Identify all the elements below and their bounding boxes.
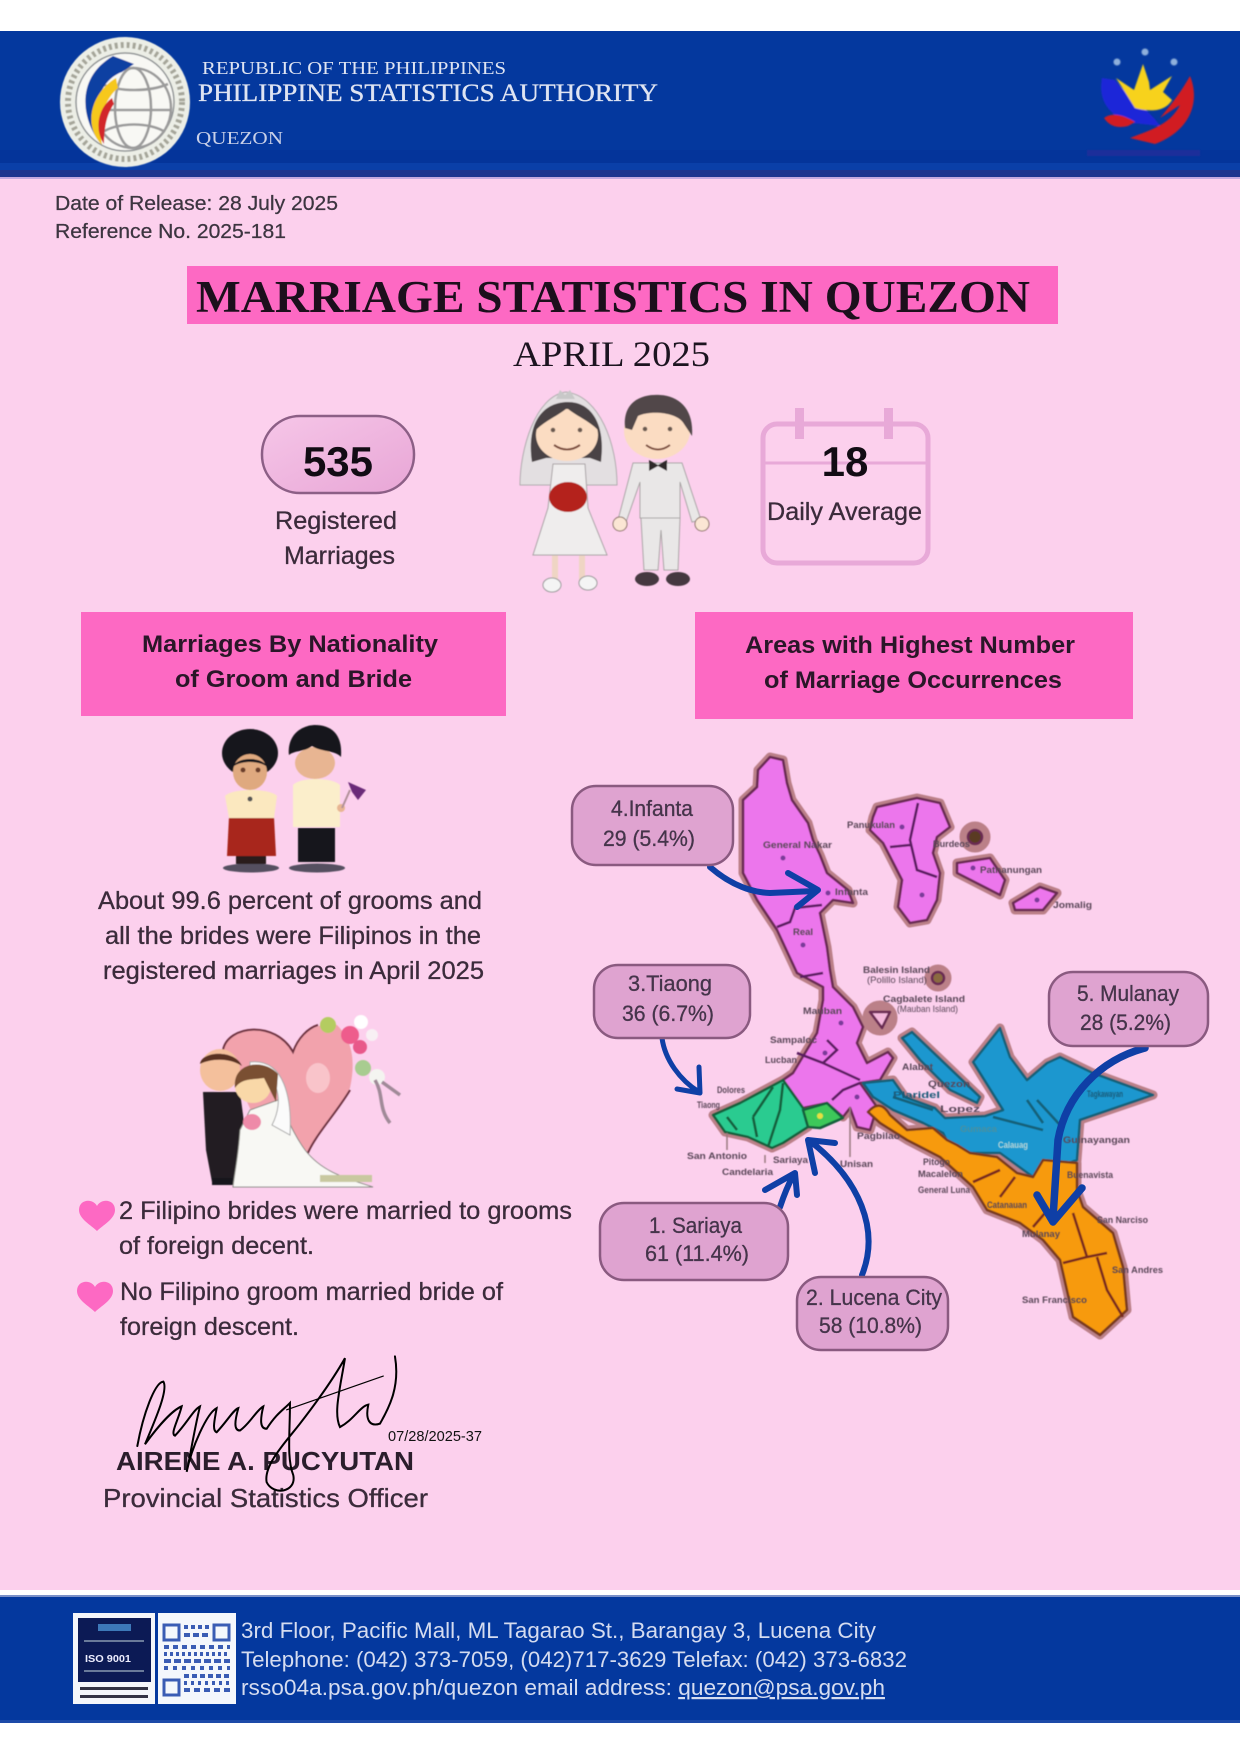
- callout: Tiaong: 3.Tiaong: [628, 971, 712, 996]
- subtitle: APRIL 2025: [513, 334, 710, 374]
- release info: Date of Release: 28 July 2025: [55, 193, 338, 215]
- callout: Infanta: 29 (5.4%): [603, 826, 695, 851]
- heading: nationality: [81, 612, 506, 716]
- place labels: Dolores: [717, 1085, 745, 1096]
- text: nationality summary: all the brides were Filipinos in the: [105, 922, 481, 950]
- text: nationality summary: registered marriages in April 2025: [103, 957, 484, 985]
- illustration: wedding couple with heart: [200, 1015, 400, 1187]
- callout: Sariaya: 1. Sariaya: [649, 1213, 743, 1238]
- place labels: Cagbalete Island: [883, 994, 965, 1005]
- place labels: Unisan: [840, 1159, 873, 1170]
- bullet: heart icon with brides statement: [79, 1197, 572, 1260]
- callout: Infanta: 4.Infanta: [611, 796, 694, 821]
- place labels: General Nakar: [763, 840, 832, 851]
- arrows to highlighted areas: [662, 867, 1145, 1275]
- callout: Mulanay: 5. Mulanay: [1077, 981, 1179, 1006]
- place labels: Quezon: [928, 1079, 970, 1090]
- callout: Sariaya: 61 (11.4%): [645, 1241, 749, 1266]
- place labels: Buenavista: [1067, 1170, 1114, 1181]
- ISO certification badge: [73, 1613, 155, 1704]
- signature date stamp: 07/28/2025-37: [388, 1428, 482, 1445]
- callout: Lucena City: 2. Lucena City: [806, 1285, 942, 1310]
- place labels: Plaridel: [893, 1090, 940, 1101]
- place labels: (Mauban Island): [897, 1004, 958, 1015]
- bullet: heart icon with brides statement: of foreign decent.: [119, 1232, 314, 1260]
- place labels: Pagbilao: [857, 1131, 900, 1142]
- place labels: Macalelon: [918, 1169, 963, 1180]
- footer contact text: 3rd Floor, Pacific Mall, ML Tagarao St., Barangay 3, Lucena City: [241, 1618, 876, 1643]
- place labels: Infanta: [835, 887, 869, 898]
- callout: Lucena City: 58 (10.8%): [819, 1313, 922, 1338]
- footer contact text: Telephone: (042) 373-7059, (042)717-3629 Telefax: (042) 373-6832: [241, 1647, 907, 1672]
- place labels: San Antonio: [687, 1151, 747, 1162]
- place labels: Lopez: [940, 1104, 980, 1115]
- illustration: bride and groom: [520, 390, 709, 592]
- stat: daily average calendar: Daily Average: [767, 498, 922, 526]
- place labels: Candelaria: [722, 1167, 774, 1178]
- place labels: Calauag: [998, 1140, 1028, 1151]
- place labels: Sariaya: [773, 1155, 809, 1166]
- map regions: [713, 757, 1153, 1335]
- header text: [196, 58, 658, 148]
- bullet: heart icon with grooms statement: foreign descent.: [120, 1313, 299, 1341]
- place labels: Guinayangan: [1063, 1135, 1130, 1146]
- header text: QUEZON: [196, 128, 283, 148]
- stat: registered marriages: Marriages: [284, 542, 395, 570]
- place labels: San Andres: [1112, 1265, 1163, 1276]
- place labels: Burdeos: [933, 839, 970, 850]
- place labels: San Francisco: [1022, 1295, 1087, 1306]
- ISO certification badge: ISO 9001: [85, 1654, 131, 1665]
- title: MARRIAGE STATISTICS IN QUEZON: [196, 272, 1030, 322]
- callout: Tiaong: [594, 965, 750, 1038]
- arrow: Sariaya: [765, 1173, 797, 1207]
- logo: Philippine Statistics Authority seal: [60, 37, 190, 167]
- callout: Tiaong: 36 (6.7%): [622, 1001, 714, 1026]
- heading: areas: of Marriage Occurrences: [764, 667, 1062, 694]
- footer band: [0, 1595, 1240, 1723]
- arrow: Infanta: [710, 867, 818, 907]
- callout: Infanta: [572, 786, 733, 865]
- place labels: Balesin Island: [863, 965, 930, 976]
- place labels: Alabat: [902, 1062, 934, 1073]
- signature: [137, 1356, 396, 1491]
- QR code: [158, 1613, 236, 1704]
- heading: nationality: Marriages By Nationality: [142, 631, 439, 658]
- stat: registered marriages: Registered: [275, 507, 397, 535]
- signatory name and title: Provincial Statistics Officer: [103, 1483, 428, 1513]
- place labels: Lucban: [765, 1055, 797, 1066]
- bullet: heart icon with grooms statement: No Filipino groom married bride of: [120, 1278, 503, 1306]
- footer contact text: rsso04a.psa.gov.ph/quezon email address: quezon@psa.gov.ph: [241, 1675, 885, 1700]
- signatory name and title: AIRENE A. PUCYUTAN: [116, 1446, 414, 1476]
- arrow: Lucena City: [808, 1140, 869, 1275]
- heading: areas: [695, 612, 1133, 719]
- bullet: heart icon with grooms statement: [77, 1278, 503, 1341]
- header band: [0, 31, 1240, 179]
- municipal boundaries: [727, 803, 1123, 1317]
- place labels: General Luna: [918, 1185, 971, 1196]
- header text: PHILIPPINE STATISTICS AUTHORITY: [198, 80, 658, 107]
- place labels: Tagkawayan: [1087, 1089, 1123, 1100]
- place labels: Catanauan: [987, 1200, 1027, 1211]
- arrow: Tiaong: [662, 1038, 700, 1093]
- callout: Sariaya: [600, 1203, 788, 1280]
- footer contact text: [241, 1618, 907, 1700]
- illustration: Filipino couple in traditional dress: [222, 725, 366, 872]
- text: nationality summary: [98, 887, 484, 985]
- place labels: Real: [793, 927, 813, 938]
- arrow: Mulanay: [1037, 1048, 1145, 1222]
- place labels: Jomalig: [1053, 900, 1092, 911]
- place labels: Panukulan: [847, 820, 895, 831]
- place labels: Mauban: [803, 1006, 842, 1017]
- place labels: Patnanungan: [980, 865, 1042, 876]
- place labels: [687, 820, 1163, 1306]
- text: nationality summary: About 99.6 percent of grooms and: [98, 887, 482, 915]
- callout: Mulanay: [1049, 972, 1208, 1046]
- stat: registered marriages: 535: [303, 438, 373, 485]
- callout: Mulanay: 28 (5.2%): [1080, 1010, 1171, 1035]
- place labels: Sampaloc: [770, 1035, 817, 1046]
- release info: Reference No. 2025-181: [55, 221, 286, 243]
- place labels: (Polillo Island): [867, 975, 927, 986]
- release info: [55, 193, 338, 243]
- callout: Lucena City: [797, 1277, 948, 1350]
- place labels: Gumaca: [960, 1124, 998, 1135]
- place labels: Tiaong: [697, 1100, 720, 1111]
- place labels: Pitogo: [923, 1157, 950, 1168]
- stat: daily average calendar: [763, 408, 928, 563]
- signatory name and title: [103, 1446, 428, 1513]
- header text: REPUBLIC OF THE PHILIPPINES: [202, 58, 506, 78]
- heading: areas: Areas with Highest Number: [745, 632, 1075, 659]
- stat: daily average calendar: 18: [822, 438, 868, 485]
- heading: nationality: of Groom and Bride: [175, 666, 412, 693]
- bullet: heart icon with brides statement: 2 Filipino brides were married to grooms: [119, 1197, 572, 1225]
- place labels: San Narciso: [1097, 1215, 1148, 1226]
- place labels: Mulanay: [1022, 1229, 1061, 1240]
- map of Quezon: [662, 757, 1163, 1335]
- logo: Bagong Pilipinas sun: [1087, 48, 1200, 156]
- stat: registered marriages: [262, 416, 414, 570]
